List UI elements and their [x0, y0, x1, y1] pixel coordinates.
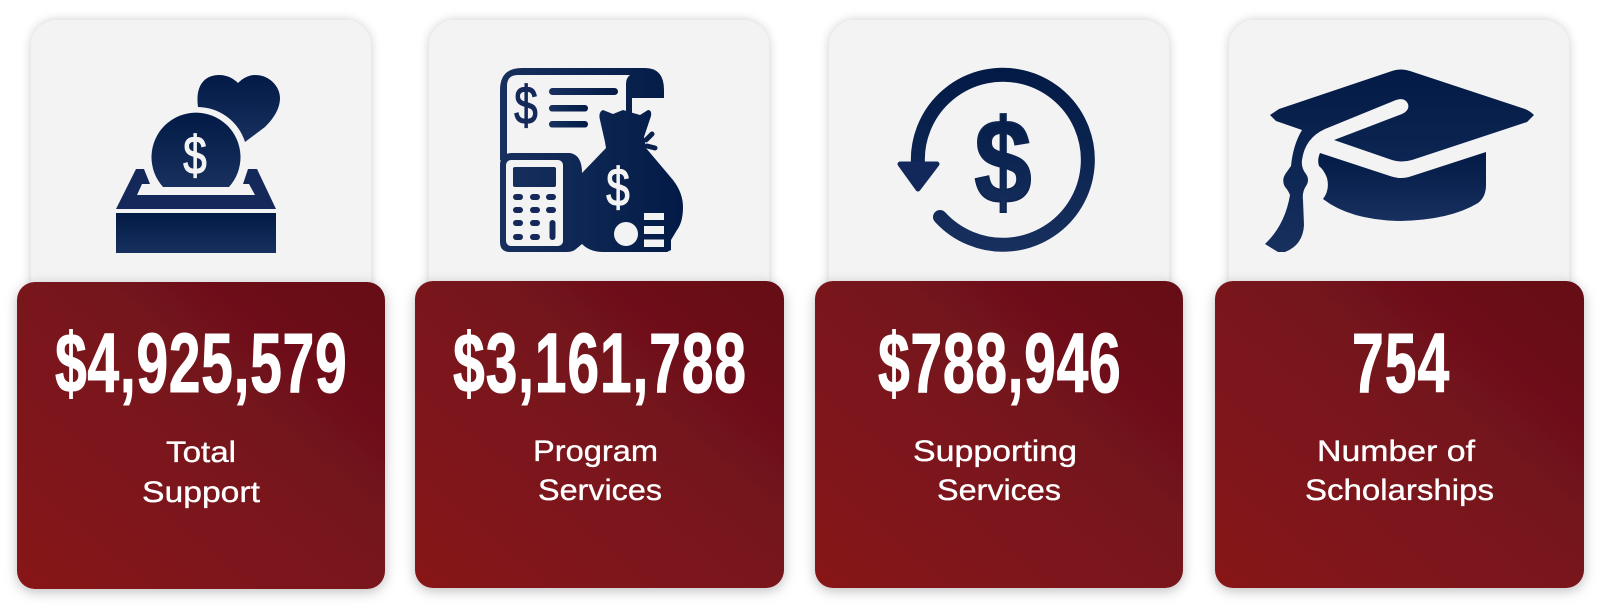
- panel: program services value: [415, 281, 784, 588]
- label: Support: [142, 476, 261, 509]
- icon: graduation cap: [1265, 70, 1534, 252]
- label: [913, 435, 1077, 507]
- label: Program: [533, 435, 658, 468]
- label: [142, 436, 261, 509]
- icon: coin and heart donation box: [116, 75, 280, 253]
- value: $4,925,579: [55, 317, 347, 411]
- light icon panel: [429, 20, 769, 310]
- card: number of scholarships: [1215, 20, 1584, 588]
- panel: number of scholarships value: [1215, 281, 1584, 588]
- light icon panel: [1229, 20, 1569, 310]
- light icon panel: [31, 20, 371, 310]
- icon: circular arrow with dollar: $: [974, 95, 1032, 229]
- light icon panel: [829, 20, 1169, 310]
- label: Services: [937, 474, 1061, 507]
- icon: circular arrow with dollar: [900, 75, 1088, 245]
- label: Scholarships: [1305, 474, 1494, 507]
- label: [533, 435, 662, 507]
- icon: invoice, calculator and money bag: $: [514, 76, 538, 136]
- icon: invoice, calculator and money bag: $: [606, 158, 630, 218]
- card: program services: [415, 20, 784, 588]
- label: Number of: [1317, 435, 1476, 468]
- label: Supporting: [913, 435, 1077, 468]
- value: 754: [1352, 317, 1449, 411]
- panel: total support value: [17, 282, 385, 589]
- card: supporting services: [815, 20, 1183, 588]
- value: $3,161,788: [453, 317, 746, 411]
- value: $788,946: [878, 317, 1121, 411]
- icon: coin and heart donation box: $: [183, 126, 207, 186]
- card: total support: [17, 20, 385, 589]
- label: Services: [538, 474, 662, 507]
- panel: supporting services value: [815, 281, 1183, 588]
- icon: invoice, calculator and money bag: [500, 68, 683, 252]
- label: Total: [166, 436, 236, 469]
- label: [1305, 435, 1494, 507]
